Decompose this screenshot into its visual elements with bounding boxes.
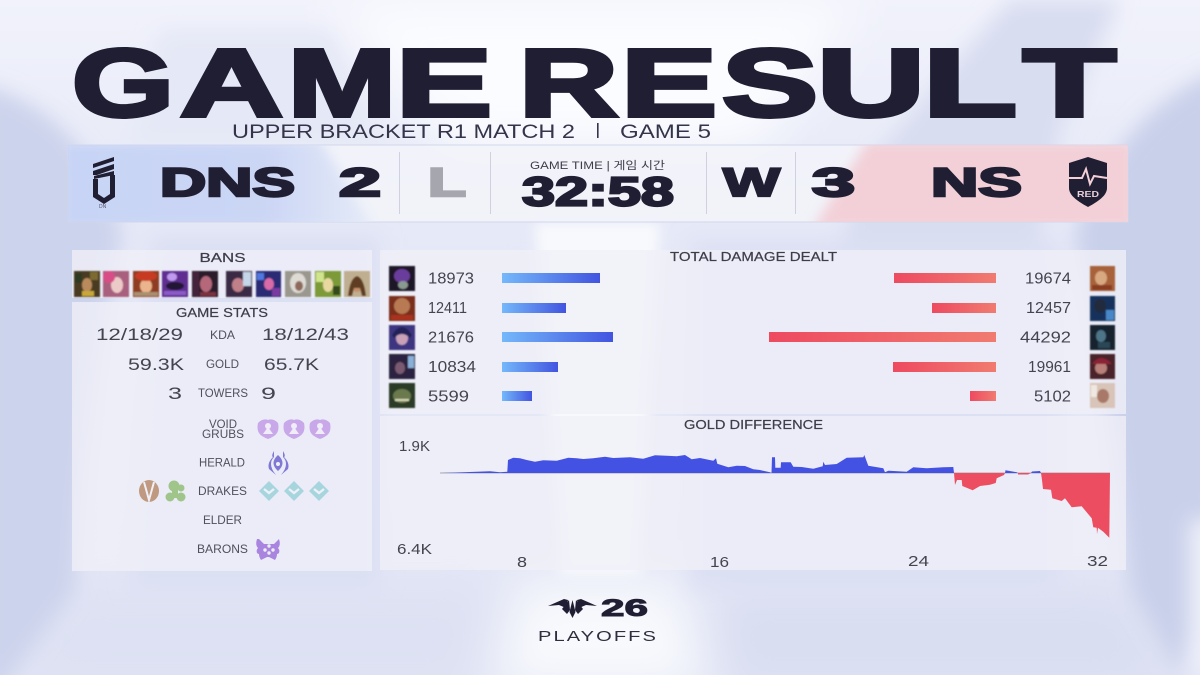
damage numbers: red side: 44292: [1020, 330, 1071, 346]
damage numbers: red side: [1020, 270, 1071, 406]
row: KDA: [96, 325, 349, 344]
icon: ocean drake 3: [309, 481, 329, 501]
damage numbers: red side: 5102: [1034, 388, 1071, 406]
axis labels: 1.9K: [399, 439, 430, 455]
subtitle: [232, 122, 711, 143]
icon: mountain drake: [139, 480, 159, 502]
row: drakes: [139, 480, 329, 502]
row: void grubs: [202, 419, 330, 441]
score: DNS: 2: [339, 161, 381, 205]
damage bars: blue side: [502, 273, 613, 401]
title: U: [817, 30, 925, 137]
title: E: [396, 30, 492, 137]
row: gold: [128, 355, 320, 374]
title: S: [722, 30, 818, 137]
row: elder: ELDER: [203, 515, 242, 527]
row: towers: 9: [261, 384, 276, 403]
row: gold: 59.3K: [128, 355, 185, 374]
row: gold: GOLD: [206, 359, 239, 371]
champion portraits: blue side: [389, 266, 415, 408]
footer logo: 26 playoffs: [538, 595, 658, 645]
title: A: [180, 30, 283, 137]
damage numbers: blue side: 12411: [428, 300, 467, 317]
icon: wing emblem: [548, 599, 597, 618]
panel: gold difference: [380, 416, 1126, 571]
axis labels: 16: [710, 555, 729, 571]
icon: baron: [256, 539, 280, 560]
result: W: W: [723, 161, 780, 205]
label: 26: 26: [601, 595, 648, 622]
axis labels: 8: [517, 555, 527, 571]
game time label: GAME TIME | 게임 시간: [530, 159, 665, 172]
axis labels: 24: [908, 554, 929, 570]
row: towers: 3: [168, 384, 182, 403]
title: [72, 30, 1116, 137]
row: towers: TOWERS: [198, 388, 248, 400]
team name: DNS: DNS: [160, 161, 295, 205]
icon: herald: [268, 451, 288, 475]
icon: DNS team logo: DN: [99, 204, 107, 210]
damage numbers: red side: 12457: [1026, 300, 1071, 317]
axis labels: [397, 439, 1108, 571]
heading: game stats: GAME STATS: [176, 306, 268, 320]
icon: void grub 3: [310, 419, 330, 439]
title: G: [72, 30, 174, 137]
icons: banned champions: [74, 271, 370, 297]
subtitle: UPPER BRACKET R1 MATCH 2: [232, 122, 575, 143]
team name: NS: NS: [931, 161, 1022, 205]
icon: DNS team logo: [93, 157, 115, 210]
panel: game stats: [72, 302, 372, 571]
game time: 32:58: [522, 168, 674, 214]
title: E: [621, 30, 717, 137]
line chart: gold difference area: [440, 455, 1110, 538]
row: KDA: 12/18/29: [96, 325, 183, 344]
damage numbers: blue side: [428, 270, 476, 406]
score: NS: 3: [812, 161, 855, 205]
icon: ocean drake 2: [284, 481, 304, 501]
row: KDA: KDA: [210, 330, 235, 342]
row: void grubs: VOID: [209, 419, 237, 431]
heading: total damage dealt: TOTAL DAMAGE DEALT: [670, 250, 837, 264]
result: L: L: [428, 161, 466, 205]
icon: NS team logo: [1069, 157, 1107, 207]
title: R: [519, 30, 618, 137]
panel: total damage dealt: [380, 250, 1126, 414]
damage bars: red side: [769, 273, 996, 401]
damage numbers: blue side: 10834: [428, 359, 476, 376]
axis labels: 6.4K: [397, 542, 432, 558]
heading: gold difference: GOLD DIFFERENCE: [684, 418, 823, 432]
icon: void grub 1: [258, 419, 278, 439]
title: M: [288, 30, 396, 137]
icon: void grub 2: [284, 419, 304, 439]
panel: bans: [72, 250, 372, 298]
panel: score bar: [68, 144, 1128, 222]
axis labels: 32: [1087, 554, 1108, 570]
row: barons: BARONS: [197, 544, 248, 556]
damage numbers: blue side: 21676: [428, 330, 474, 346]
damage numbers: red side: 19674: [1025, 270, 1071, 288]
title: L: [923, 30, 1017, 137]
row: herald: [199, 451, 288, 475]
icon: NS team logo: RED: [1077, 189, 1099, 199]
row: herald: HERALD: [199, 458, 245, 470]
icon: cloud drake: [166, 480, 186, 502]
row: void grubs: GRUBS: [202, 429, 244, 441]
row: KDA: 18/12/43: [262, 325, 349, 344]
row: drakes: DRAKES: [198, 486, 247, 498]
label: playoffs: PLAYOFFS: [538, 629, 658, 645]
champion portraits: red side: [1090, 266, 1115, 408]
title: T: [1023, 30, 1116, 137]
row: towers: [168, 384, 276, 403]
damage numbers: blue side: 5599: [428, 388, 469, 406]
right lavender mass: [1075, 70, 1200, 675]
row: barons: [197, 539, 280, 560]
damage numbers: red side: 19961: [1028, 359, 1071, 376]
row: gold: 65.7K: [264, 355, 320, 374]
icon: ocean drake 1: [259, 481, 279, 501]
subtitle: GAME 5: [620, 122, 711, 143]
damage numbers: blue side: 18973: [428, 270, 474, 288]
heading: bans: BANS: [200, 251, 246, 265]
left lavender mass: [0, 85, 122, 675]
